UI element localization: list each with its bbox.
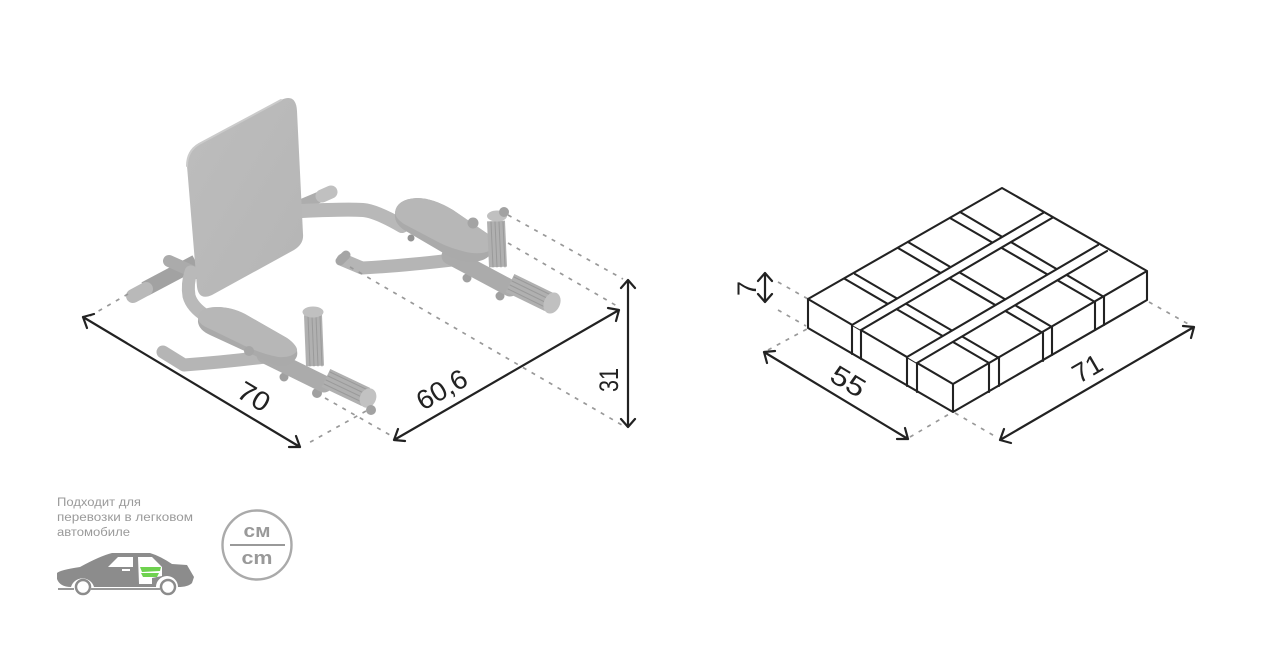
note: car transport text: Подходит для (57, 497, 141, 509)
note: car transport text: перевозки в легковом (57, 512, 193, 524)
label: 70: 70 (232, 375, 276, 418)
label: 71: 71 (1067, 348, 1108, 389)
upper horizontal grip (508, 277, 564, 316)
upper leg (340, 234, 510, 300)
note: car transport text (57, 497, 193, 539)
upper vertical grip (487, 207, 509, 267)
box outline (808, 188, 1147, 412)
icon: cm units badge (222, 510, 292, 580)
cross straps (845, 212, 1104, 363)
rear left tube (133, 261, 196, 296)
arrow: height 31 (621, 280, 635, 427)
strap sides (852, 297, 1104, 392)
note: car transport text: автомобиле (57, 527, 130, 539)
label: 31: 31 (594, 368, 624, 392)
icon: car (57, 553, 194, 594)
dimension labels (232, 281, 1108, 418)
upper seat (395, 198, 492, 262)
arrow: box 71 (1000, 326, 1194, 443)
lower vertical tube (188, 272, 206, 316)
arrow: width 70 (83, 314, 300, 447)
rear right tube (302, 192, 402, 226)
label: 7: 7 (732, 281, 762, 296)
backrest (187, 98, 303, 297)
dashed guide lines (90, 215, 1190, 445)
long straps (852, 213, 1052, 330)
product: exercise frame (133, 98, 564, 415)
icon: cm units badge: cm (242, 548, 272, 568)
package box (808, 188, 1147, 412)
lower leg and tube (163, 352, 324, 398)
lower vertical grip (302, 306, 324, 366)
arrow: box 7 (758, 273, 772, 302)
label: 55: 55 (825, 359, 871, 404)
label: 60,6: 60,6 (411, 363, 473, 416)
arrow: box 55 (764, 351, 908, 439)
dimension arrows (83, 273, 1194, 447)
lower horizontal grip (324, 372, 379, 415)
icon: cm units badge: см (244, 521, 270, 541)
lower seat (198, 307, 297, 366)
arrow: depth 60,6 (394, 308, 619, 441)
